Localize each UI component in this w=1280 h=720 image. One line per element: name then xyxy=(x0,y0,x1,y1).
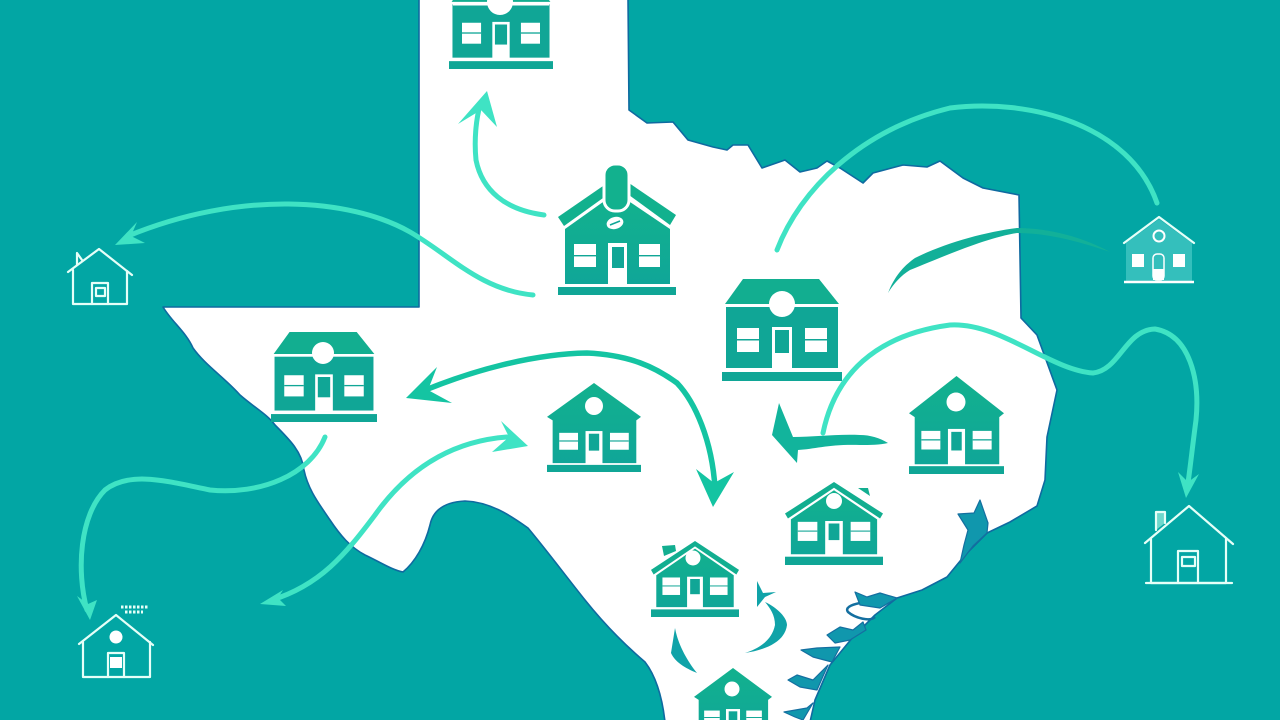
house: south east xyxy=(785,482,883,565)
arrow: central house to west outline house xyxy=(115,204,533,295)
map: Texas outline xyxy=(163,0,1057,720)
house: south xyxy=(651,541,739,617)
house: west flat roof xyxy=(271,332,377,422)
arrow: north east swoop to east house xyxy=(777,106,1157,250)
house: centre xyxy=(547,383,641,472)
house: bottom (cropped) xyxy=(694,668,772,720)
house: south west outline xyxy=(79,607,153,677)
house: north east flat roof xyxy=(722,279,842,381)
arrow: small southern swoosh xyxy=(745,581,787,653)
arrow: swoosh to east house xyxy=(888,228,1110,293)
arrow: west house to south west outline house xyxy=(77,437,325,620)
house: west outline xyxy=(68,249,132,304)
arrow: looping arrow to south east outline house xyxy=(823,325,1199,498)
arrow: small southern wedge xyxy=(671,628,697,673)
house: east xyxy=(909,376,1004,474)
arrow: central house up to top house xyxy=(458,91,544,215)
coastal barrier islands xyxy=(784,500,988,720)
house: top (cropped) xyxy=(449,0,553,69)
arrow: south west to centre double headed xyxy=(260,421,528,606)
arrow: head and tail by eastern house xyxy=(772,403,888,463)
arrow: central long arrow west xyxy=(406,353,734,507)
house: east light filled xyxy=(1124,217,1194,282)
house: central with chimney xyxy=(558,164,676,295)
house: south east outline xyxy=(1145,506,1233,583)
